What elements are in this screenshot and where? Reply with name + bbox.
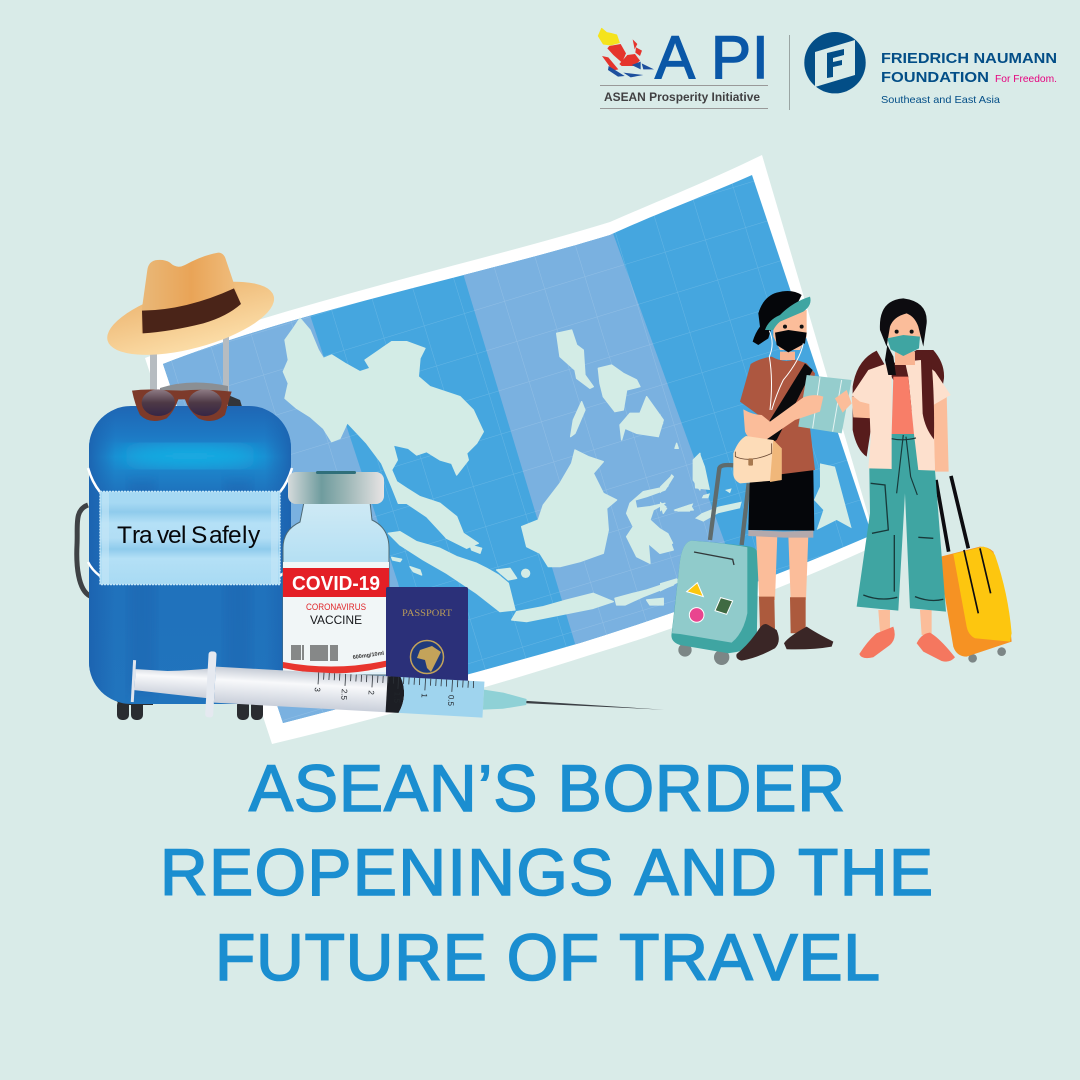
needle [526, 701, 664, 711]
vial cap [288, 471, 384, 504]
scale numbers: 2 [367, 690, 376, 696]
tank top [892, 377, 914, 434]
hat [100, 253, 281, 370]
title [160, 751, 933, 994]
logo: ASEAN Prosperity Initiative [598, 24, 769, 109]
title: REOPENINGS AND THE [160, 835, 933, 909]
liquid [399, 677, 484, 718]
Sulawesi [627, 475, 673, 563]
hair [880, 298, 927, 347]
illustration: passport [386, 587, 468, 687]
trouser drawstring [892, 435, 917, 495]
suitcase pull handle [150, 335, 243, 412]
map paper border [145, 155, 877, 744]
eyes [783, 325, 787, 329]
map folded panels [163, 175, 868, 723]
illustration: syringe [130, 647, 666, 743]
barrel [214, 667, 391, 712]
icon: FNF circle [804, 32, 866, 93]
traveller: woman with yellow suitcase [852, 298, 1012, 663]
Java and Lesser Sunda [512, 580, 677, 622]
hat [753, 291, 802, 345]
scale numbers: 0.5 [446, 695, 456, 707]
icon: gold globe [410, 640, 444, 674]
plunger [130, 647, 217, 718]
trousers [857, 434, 946, 612]
logo text: FRIEDRICH NAUMANN [881, 51, 1057, 67]
shoulder bag [733, 436, 782, 483]
head [780, 352, 795, 360]
needle hub [483, 690, 527, 712]
backpack strap [921, 360, 934, 439]
yellow suitcase [936, 476, 1012, 663]
black mask [775, 330, 807, 352]
illustration: COVID-19 vaccine vial [283, 471, 389, 675]
vial label: VACCINE [310, 613, 362, 627]
logo: Friedrich Naumann Foundation: For Freedom. [995, 73, 1057, 85]
map: folded ASEAN map [145, 155, 869, 744]
sunglasses [132, 389, 232, 421]
logo: Friedrich Naumann Foundation [804, 32, 1057, 106]
Sumatra [388, 532, 515, 612]
arms [933, 393, 949, 472]
title: FUTURE OF TRAVEL [215, 920, 880, 994]
illustration: two masked travellers [671, 291, 1012, 665]
strap [761, 363, 813, 448]
suitcase wheels [98, 680, 263, 720]
eyes [895, 330, 899, 334]
map held in hands [798, 375, 852, 433]
vial label: CORONAVIRUS [306, 602, 366, 612]
arm [743, 395, 823, 442]
neck and head [895, 352, 915, 365]
title: ASEAN’S BORDER [249, 751, 845, 825]
shirt [852, 362, 892, 469]
backpack [853, 350, 944, 457]
passport label: PASSPORT [402, 609, 452, 619]
barcode [292, 645, 337, 661]
t-shirt [740, 357, 815, 474]
icon: ASEAN map mark [598, 28, 654, 77]
scale ticks [318, 672, 474, 693]
shoes [859, 627, 895, 658]
vial glass [283, 502, 389, 675]
scale numbers: 1 [419, 693, 429, 699]
legs [756, 535, 808, 600]
vial label: 600mg/10ml [352, 651, 385, 661]
earphones [769, 331, 803, 410]
small islands [392, 443, 700, 580]
logo: Friedrich Naumann Foundation: Southeast and East Asia [881, 94, 1000, 106]
suitcase side handle [77, 505, 90, 596]
map: land masses of Southeast Asia [283, 318, 700, 622]
plunger tip [386, 676, 405, 713]
face mask [88, 468, 292, 584]
traveller: man with teal suitcase [671, 291, 852, 665]
teal suitcase [671, 465, 758, 665]
logo: Friedrich Naumann Foundation: FOUNDATION [881, 70, 989, 86]
teal mask [887, 335, 920, 356]
mask text: Travel Safely [117, 522, 261, 549]
scale numbers: 2.5 [339, 689, 349, 701]
Philippines [557, 330, 663, 440]
logo subtitle: ASEAN Prosperity Initiative [604, 92, 760, 104]
suitcase body [89, 406, 291, 704]
vial label [283, 562, 389, 674]
socks [759, 597, 806, 633]
mainland Southeast Asia [283, 318, 483, 548]
teal hair [765, 297, 811, 330]
scale numbers [312, 687, 456, 707]
logo wordmark: API: API [655, 24, 769, 91]
map: eastern islands [660, 413, 852, 592]
Borneo [522, 450, 617, 567]
shorts [748, 470, 814, 531]
feet [878, 610, 932, 635]
scale numbers: 1.5 [392, 692, 402, 704]
label text: COVID-19 [292, 573, 380, 595]
illustration: blue suitcase with hat, sunglasses and mask [77, 253, 292, 720]
shoes [736, 624, 779, 661]
scale numbers: 3 [313, 687, 322, 693]
